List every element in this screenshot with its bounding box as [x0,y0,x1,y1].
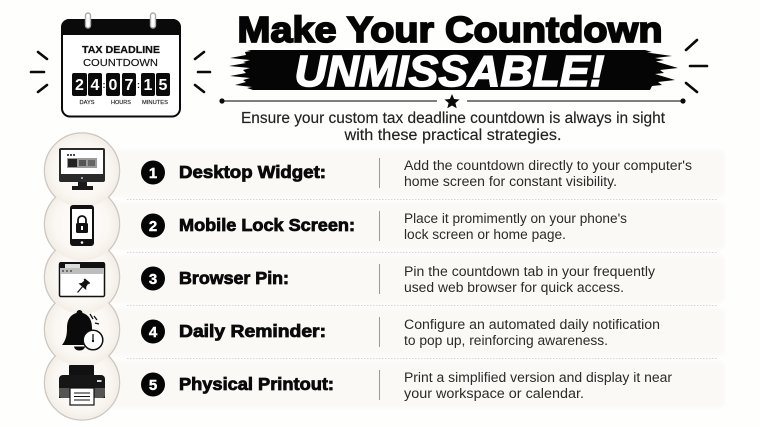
row 4: daily reminder: Configure an automated daily notification [404,317,660,332]
row 4: daily reminder: 4 [149,324,158,341]
row 2: mobile lock screen: Mobile Lock Screen: [179,215,355,235]
row 5: physical printout: Physical Printout: [179,374,334,394]
icon: countdown calendar: 7 [125,77,134,94]
row 3: browser pin: Pin the countdown tab in your frequently [404,264,655,279]
row 1: desktop widget: home screen for constant visibility. [404,174,617,189]
row 2: mobile lock screen: Place it promimently on your phone's [404,211,627,226]
star divider [219,94,686,108]
icon: countdown calendar: : [137,80,140,90]
row 1: desktop widget: 1 [149,165,157,182]
icon: bell with clock [62,310,103,350]
icon: countdown calendar: 5 [159,77,168,94]
row 1: desktop widget [141,158,692,189]
icon: printer [59,365,105,405]
row 3: browser pin [141,264,655,295]
icon chain: circles [44,133,120,420]
row 3: browser pin: used web browser for quick access. [404,280,624,295]
icon: left burst lines [31,52,47,92]
panel: row backgrounds [105,150,725,408]
icon: countdown calendar: MINUTES [142,100,168,106]
row 5: physical printout [141,370,673,401]
icon: right burst lines [686,40,707,92]
subtitle: with these practical strategies. [343,127,562,144]
icon: countdown calendar: COUNTDOWN [83,57,158,69]
row 1: desktop widget: Desktop Widget: [179,162,326,182]
heading banner: unmissable: UNMISSABLE! [294,47,604,96]
heading banner: unmissable [229,47,678,96]
icon: countdown calendar: TAX DEADLINE [82,44,160,56]
icon: middle burst lines [195,52,210,92]
row 3: browser pin: 3 [149,271,157,288]
subtitle [241,110,666,144]
icon: countdown calendar: 0 [109,77,118,94]
row 2: mobile lock screen: 2 [149,218,157,235]
row 1: desktop widget: Add the countdown directly to your computer's [404,158,692,173]
row 3: browser pin: Browser Pin: [179,268,289,288]
icon: countdown calendar [61,13,181,116]
icon: browser pin [59,262,105,296]
row 4: daily reminder: Daily Reminder: [179,321,326,341]
row 4: daily reminder [141,317,660,348]
row 4: daily reminder: to pop up, reinforcing awareness. [404,333,608,348]
icon: countdown calendar: DAYS [80,100,95,106]
row 5: physical printout: your workspace or calendar. [404,386,584,401]
icon: countdown calendar: : [102,80,106,90]
icon: desktop monitor [59,148,105,190]
icon: countdown calendar: 1 [144,77,153,94]
title: Make Your Countdown [238,9,662,50]
icon: countdown calendar: 4 [91,77,100,94]
icon: countdown calendar: 2 [75,77,84,94]
row 5: physical printout: 5 [149,377,157,394]
icon: phone lock [70,205,94,246]
row 2: mobile lock screen: lock screen or home page. [404,227,566,242]
row 2: mobile lock screen [141,211,627,242]
icon: countdown calendar: HOURS [111,100,131,106]
row 5: physical printout: Print a simplified version and display it near [404,370,673,385]
subtitle: Ensure your custom tax deadline countdown is always in sight [241,110,666,127]
